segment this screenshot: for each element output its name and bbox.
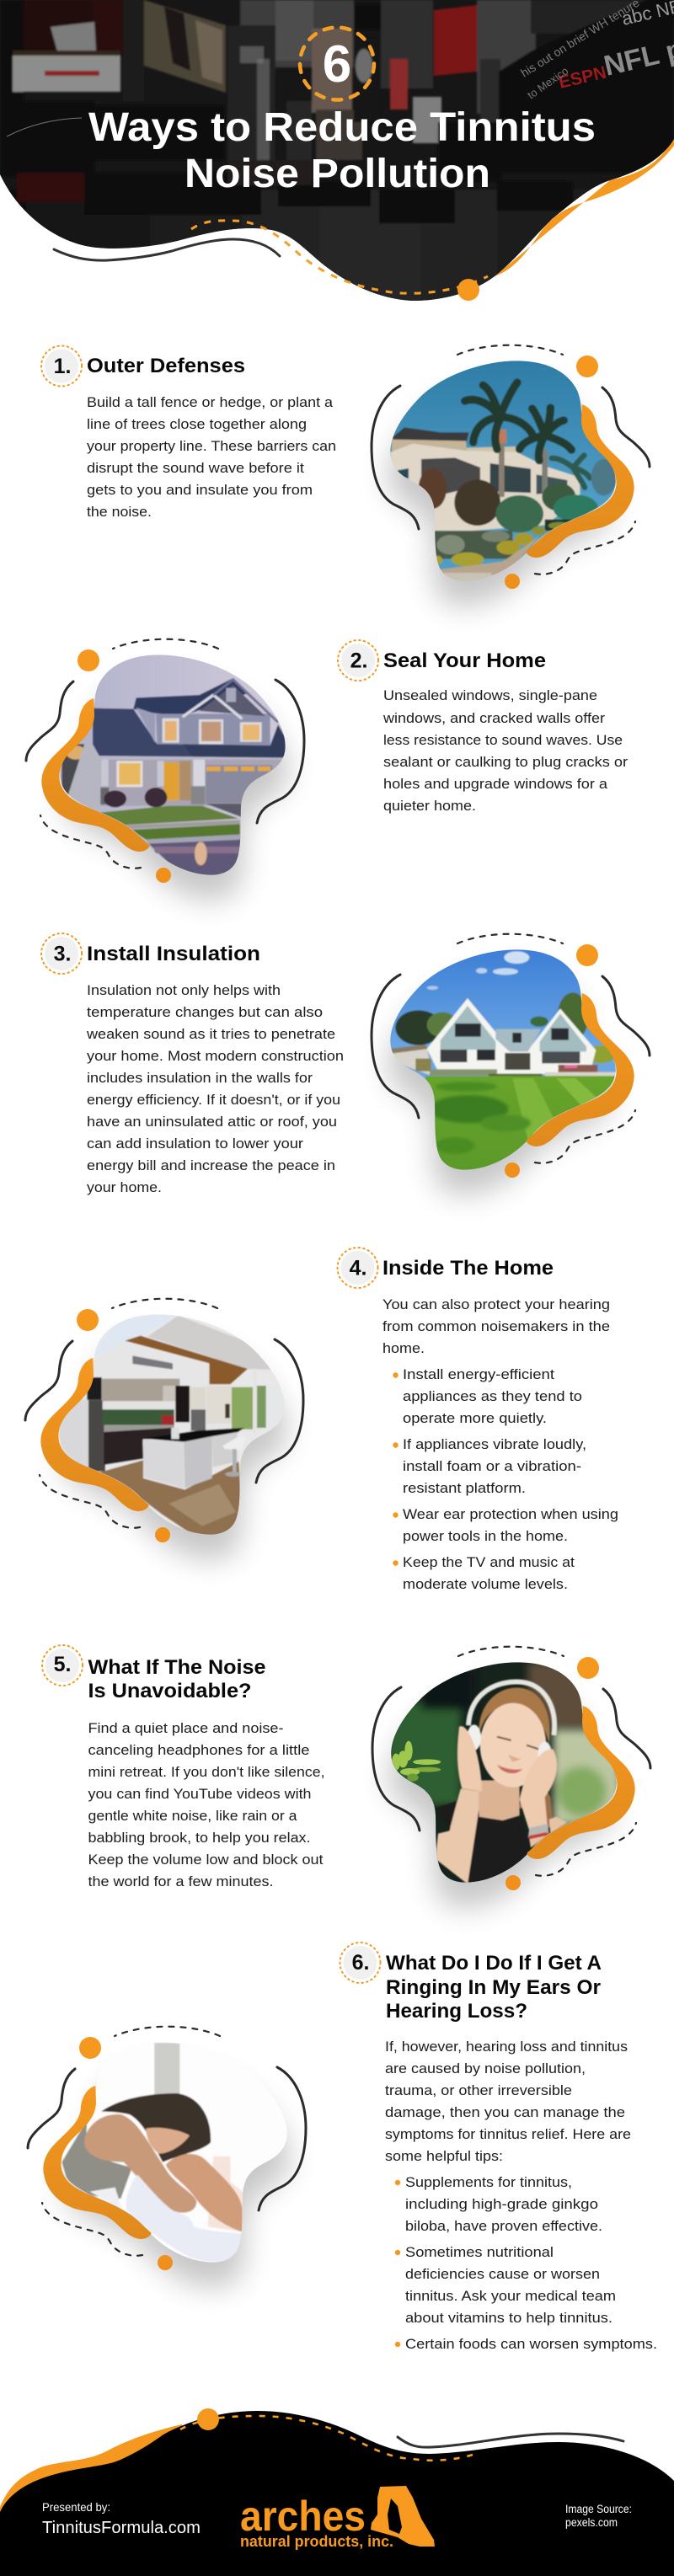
orange wave 5 [527, 1706, 635, 1859]
body text: Build a tall fence or hedge, or plant a [87, 395, 334, 410]
presented by [42, 2500, 201, 2537]
body text: disrupt the sound wave before it [87, 461, 304, 476]
body text: sealant or caulking to plug cracks or [383, 755, 629, 770]
body text: includes insulation in the walls for [87, 1071, 313, 1086]
bullet list: power tools in the home. [403, 1529, 568, 1544]
body text [382, 688, 629, 814]
gray wave line [54, 239, 280, 260]
dashed number ring [300, 27, 374, 99]
heading [88, 1656, 266, 1702]
body text: holes and upgrade windows for a [383, 777, 608, 792]
heading: Is Unavoidable? [88, 1680, 251, 1702]
bullet list: Supplements for tinnitus, [405, 2175, 572, 2190]
body text: the noise. [87, 505, 152, 520]
body text: quieter home. [383, 799, 476, 814]
panel: header banner [0, 0, 674, 307]
body text: Find a quiet place and noise- [88, 1721, 283, 1736]
body text: home. [382, 1341, 425, 1356]
heading: What If The Noise [88, 1656, 266, 1679]
photo: palm trees and building [390, 361, 616, 581]
bullet list: biloba, have proven effective. [405, 2219, 602, 2234]
orange wave 1 [526, 404, 634, 558]
blob decorations 4 [25, 1299, 303, 1560]
heading: Install Insulation [87, 943, 260, 965]
faint arc line [7, 118, 82, 136]
bullet list: deficiencies cause or worsen [405, 2267, 600, 2282]
header orange wave [495, 135, 674, 276]
number badge 6: 6. [352, 1951, 369, 1975]
bullet list: moderate volume levels. [403, 1577, 568, 1592]
presented by: Presented by: [42, 2500, 110, 2514]
body text: symptoms for tinnitus relief. Here are [385, 2127, 631, 2142]
image source: pexels.com [565, 2516, 618, 2529]
logo: arches natural products: natural products, inc. [240, 2532, 393, 2550]
body text [88, 1721, 325, 1889]
bullet list: tinnitus. Ask your medical team [405, 2289, 616, 2304]
bullet list: appliances as they tend to [403, 1389, 582, 1404]
header photo: city street [0, 0, 674, 307]
bullet list [393, 1367, 618, 1592]
panel: footer [0, 2408, 674, 2576]
body text: from common noisemakers in the [382, 1319, 610, 1334]
orange wave 6 [43, 2086, 152, 2239]
footer dashed line [180, 2416, 479, 2461]
heading: Hearing Loss? [386, 2000, 527, 2023]
body text: less resistance to sound waves. Use [383, 733, 623, 748]
billboard lettering [518, 0, 674, 101]
photo: modern kitchen [59, 1314, 285, 1535]
number badge 5: 5. [54, 1653, 71, 1676]
header orange dot [457, 279, 479, 301]
bullet list: resistant platform. [403, 1481, 526, 1496]
heading [386, 1952, 602, 2023]
blob decorations 6 [28, 2027, 306, 2288]
body text: energy efficiency. If it doesn't, or if you [87, 1093, 340, 1108]
panel: 6 What Do I Do [28, 1943, 657, 2352]
body text: you can find YouTube videos with [88, 1787, 312, 1802]
bullet list: Certain foods can worsen symptoms. [405, 2337, 657, 2352]
heading: Seal Your Home [383, 649, 546, 672]
heading: Inside The Home [382, 1257, 554, 1280]
number badge 2 [338, 640, 378, 681]
image source [565, 2503, 632, 2529]
blob decorations 5 [372, 1647, 650, 1908]
number badge 5 [42, 1645, 83, 1686]
body text: some helpful tips: [385, 2149, 503, 2164]
footer black shape [0, 2411, 674, 2576]
body text: babbling brook, to help you relax. [88, 1830, 310, 1846]
body text: line of trees close together along [87, 417, 307, 432]
body text [382, 1297, 610, 1356]
presented by: TinnitusFormula.com [42, 2519, 201, 2537]
body text: mini retreat. If you don't like silence, [88, 1765, 325, 1780]
number badge 2: 2. [350, 649, 367, 672]
body text: damage, then you can manage the [385, 2105, 625, 2120]
number badge 3 [41, 933, 82, 974]
body text [86, 983, 344, 1195]
number badge 4: 4. [350, 1257, 366, 1280]
panel: 5 What If The Noise Is Unavoidable [42, 1645, 650, 1908]
bullet list: Install energy-efficient [403, 1367, 554, 1382]
body text: Insulation not only helps with [87, 983, 281, 998]
body text: gets to you and insulate you from [87, 483, 313, 498]
bullet list: about vitamins to help tinnitus. [405, 2311, 612, 2326]
bullet list [395, 2175, 657, 2352]
body text: the world for a few minutes. [88, 1874, 273, 1889]
number badge 3: 3. [54, 942, 71, 965]
bullet list: operate more quietly. [403, 1411, 547, 1426]
photo: suburban house at dusk [60, 655, 286, 875]
orange wave 4 [40, 1358, 149, 1511]
blob decorations 2 [26, 639, 304, 901]
body text: Keep the volume low and block out [88, 1852, 324, 1868]
heading: Ringing In My Ears Or [386, 1976, 601, 1999]
footer gray wave line [398, 2434, 623, 2447]
number badge 1: 1. [54, 355, 71, 378]
body text: can add insulation to lower your [87, 1136, 304, 1152]
title [88, 105, 596, 196]
body text: trauma, or other irreversible [385, 2083, 572, 2098]
photo: woman hugging knees [62, 2042, 286, 2263]
body text: If, however, hearing loss and tinnitus [385, 2039, 628, 2055]
blob decorations 3 [372, 934, 650, 1195]
body text: energy bill and increase the peace in [87, 1158, 335, 1173]
photo: white house and lawn [390, 949, 616, 1170]
number badge 6 [340, 1943, 381, 1983]
panel: 4 Inside The Home [25, 1248, 618, 1592]
photo: woman with headphones [391, 1662, 617, 1883]
number badge 4 [337, 1248, 377, 1288]
body text: your home. [87, 1180, 162, 1195]
bullet list: If appliances vibrate loudly, [403, 1437, 586, 1452]
orange wave 2 [41, 698, 150, 852]
title: Ways to Reduce Tinnitus [88, 105, 596, 150]
heading: What Do I Do If I Get A [386, 1952, 602, 1975]
logo: arches natural products: arches [240, 2493, 366, 2540]
image source: Image Source: [565, 2503, 632, 2515]
bullet list: Keep the TV and music at [403, 1555, 575, 1570]
body text: your property line. These barriers can [87, 439, 336, 454]
body text: canceling headphones for a little [88, 1743, 310, 1758]
body text: your home. Most modern construction [87, 1049, 344, 1064]
body text: are caused by noise pollution, [385, 2061, 586, 2076]
dashed line on header [191, 221, 488, 293]
number badge 1 [41, 345, 82, 386]
panel: 2 Seal Your Home [26, 639, 629, 901]
bullet list: Wear ear protection when using [403, 1507, 618, 1522]
bullet list: install foam or a vibration- [403, 1459, 581, 1474]
footer orange dot [197, 2408, 219, 2430]
body text: windows, and cracked walls offer [382, 711, 606, 726]
billboard lettering: to Mexico [525, 64, 570, 101]
title: Noise Pollution [185, 152, 490, 196]
heading: Outer Defenses [87, 355, 245, 377]
body text: Unsealed windows, single-pane [383, 688, 597, 703]
body text: have an uninsulated attic or roof, you [87, 1114, 337, 1130]
bullet list: Sometimes nutritional [405, 2245, 554, 2260]
body text: gentle white noise, like rain or a [88, 1809, 297, 1824]
body text [385, 2039, 631, 2164]
body text: You can also protect your hearing [382, 1297, 610, 1312]
body text: weaken sound as it tries to penetrate [86, 1027, 335, 1042]
orange wave 3 [526, 993, 634, 1146]
title number 6: 6 [323, 35, 351, 94]
body text: temperature changes but can also [87, 1005, 323, 1020]
footer orange wave [0, 2424, 182, 2520]
panel: 1 Outer Defenses [41, 345, 650, 607]
billboard lettering: ESPN [557, 63, 608, 93]
panel: 3 Install Insulation [41, 933, 650, 1195]
blob decorations 1 [372, 345, 650, 607]
body text [87, 395, 336, 520]
logo: arches natural products [240, 2486, 435, 2550]
bullet list: including high-grade ginkgo [405, 2197, 598, 2212]
